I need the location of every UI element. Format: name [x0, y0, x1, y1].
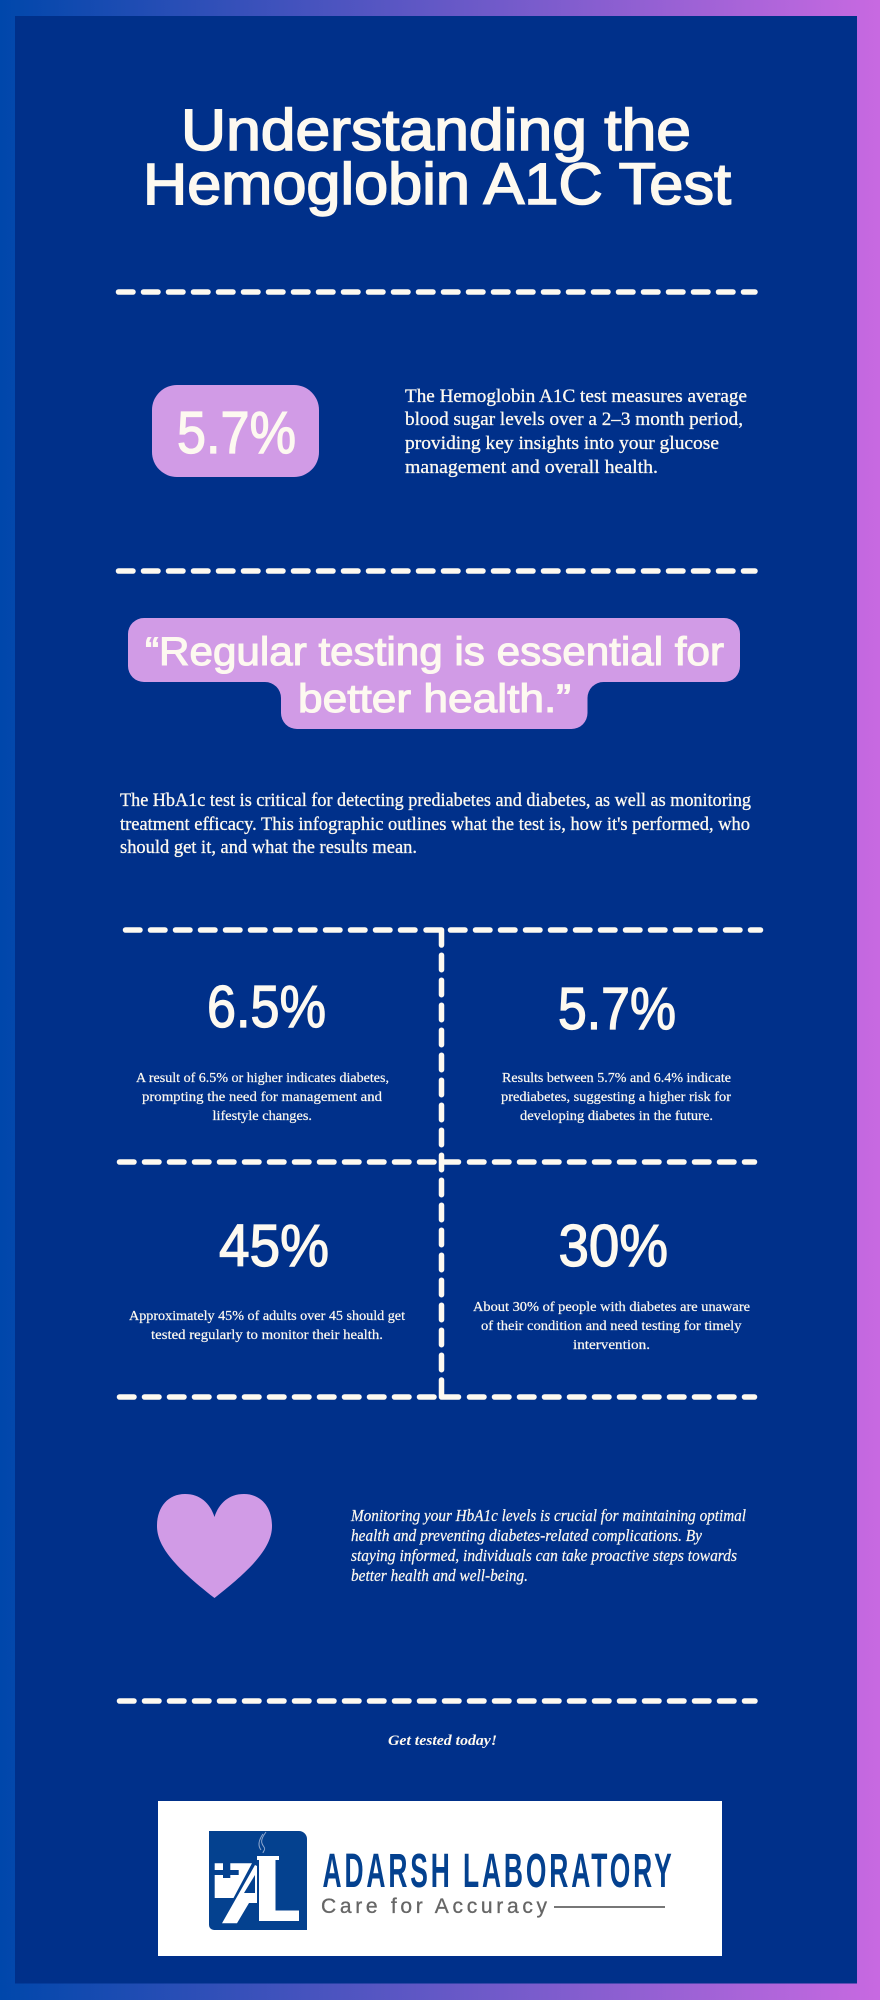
stat description: Approximately 45% of adults over 45 should get [129, 1309, 405, 1324]
intro paragraph: blood sugar levels over a 2–3 month period, [405, 409, 743, 430]
stat value: 6.5% [207, 974, 326, 1040]
stat value: 5.7% [558, 976, 676, 1042]
stat description [473, 1300, 750, 1353]
logo background [158, 1801, 722, 1956]
quote text: better health.” [298, 677, 571, 721]
quote text: “Regular testing is essential for [145, 630, 724, 674]
stat description: lifestyle changes. [212, 1109, 312, 1124]
stat badge [152, 385, 319, 477]
stat panel: 5.7% [152, 385, 319, 477]
stat cell: 30% [473, 1213, 750, 1353]
intro paragraph: management and overall health. [405, 457, 658, 478]
overview paragraph: The HbA1c test is critical for detecting prediabetes and diabetes, as well as monitoring [120, 790, 751, 811]
logo name: ADARSH LABORATORY [322, 1845, 672, 1898]
call to action: Get tested today! [388, 1733, 497, 1749]
quote callout [128, 618, 740, 729]
stat description: prediabetes, suggesting a higher risk for [501, 1090, 731, 1105]
stat description [136, 1071, 389, 1124]
closing italic paragraph [350, 1506, 746, 1585]
stat value: 5.7% [177, 400, 296, 466]
title [143, 98, 731, 217]
stat value: 45% [219, 1213, 329, 1279]
stat cell: 6.5% [136, 974, 389, 1124]
stat description: prompting the need for management and [142, 1090, 382, 1105]
stat description: developing diabetes in the future. [520, 1109, 713, 1124]
stat description: Results between 5.7% and 6.4% indicate [502, 1071, 731, 1086]
logo panel [158, 1801, 722, 1956]
closing italic paragraph: better health and well-being. [351, 1566, 528, 1585]
stat description: A result of 6.5% or higher indicates diabetes, [136, 1071, 389, 1086]
stat description: of their condition and need testing for timely [481, 1319, 742, 1334]
stat cell: 5.7% [501, 976, 731, 1124]
stat description: About 30% of people with diabetes are unaware [473, 1300, 750, 1315]
overview paragraph: should get it, and what the results mean. [120, 837, 417, 858]
stat cell: 45% [129, 1213, 405, 1343]
icon: heart [157, 1494, 272, 1598]
stat description [129, 1309, 405, 1343]
closing italic paragraph: staying informed, individuals can take proactive steps towards [351, 1546, 737, 1565]
logo icon [209, 1831, 307, 1930]
title: Hemoglobin A1C Test [143, 152, 731, 217]
intro paragraph [405, 386, 747, 478]
stat description [501, 1071, 731, 1124]
stat value: 30% [558, 1213, 668, 1279]
intro paragraph: providing key insights into your glucose [405, 433, 719, 454]
closing italic paragraph: health and preventing diabetes-related complications. By [351, 1526, 703, 1545]
overview paragraph: treatment efficacy. This infographic outlines what the test is, how it's performed, who [120, 814, 750, 835]
quote highlight shape [128, 618, 740, 729]
title: Understanding the [181, 98, 691, 163]
stat description: tested regularly to monitor their health. [151, 1328, 383, 1343]
overview paragraph [120, 790, 751, 858]
quote text [145, 630, 724, 721]
closing italic paragraph: Monitoring your HbA1c levels is crucial for maintaining optimal [350, 1506, 746, 1525]
logo tagline: Care for Accuracy [321, 1895, 548, 1918]
intro paragraph: The Hemoglobin A1C test measures average [405, 386, 747, 407]
stat description: intervention. [573, 1338, 650, 1353]
